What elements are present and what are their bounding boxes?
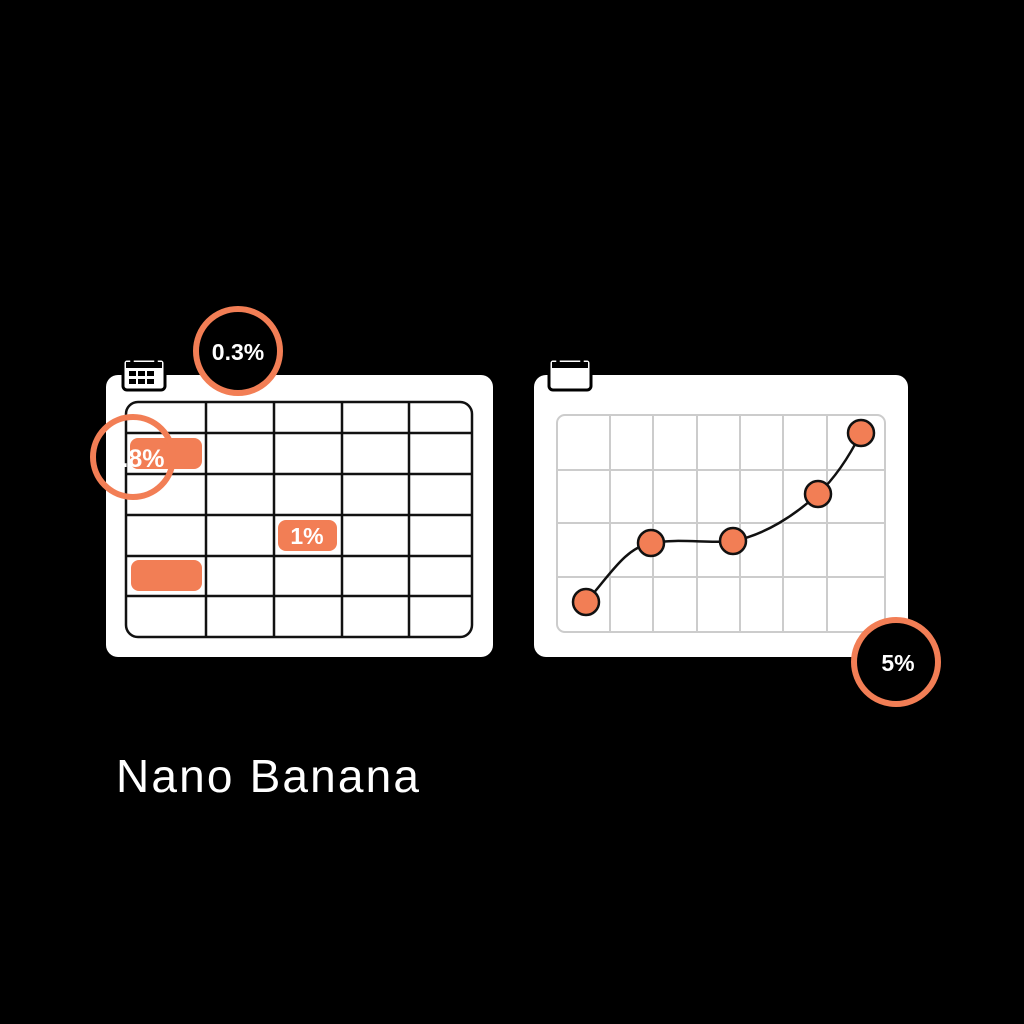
event badge: 1%: 1% — [290, 523, 324, 549]
icon: calendar right — [549, 351, 591, 390]
panel: calendar card — [106, 375, 493, 657]
data points — [573, 420, 874, 615]
callout circle: 0.3%: 0.3% — [212, 339, 264, 365]
calendar grid — [126, 402, 472, 637]
panel: line chart card — [534, 375, 908, 657]
event badge: 1% — [278, 520, 337, 551]
icon: calendar left — [123, 351, 165, 390]
title: Nano Banana — [116, 750, 419, 802]
callout circle: 5% — [854, 620, 938, 704]
trend line — [586, 433, 861, 602]
callout circle: 5%: 5% — [881, 650, 915, 676]
chart grid — [557, 415, 885, 632]
event bar: 0.8% — [130, 438, 202, 469]
event bar — [131, 560, 202, 591]
callout circle: 0.8% — [93, 417, 173, 497]
callout circle: 0.8%: 0.8% — [108, 445, 164, 473]
callout circle: 0.3% — [196, 309, 280, 393]
